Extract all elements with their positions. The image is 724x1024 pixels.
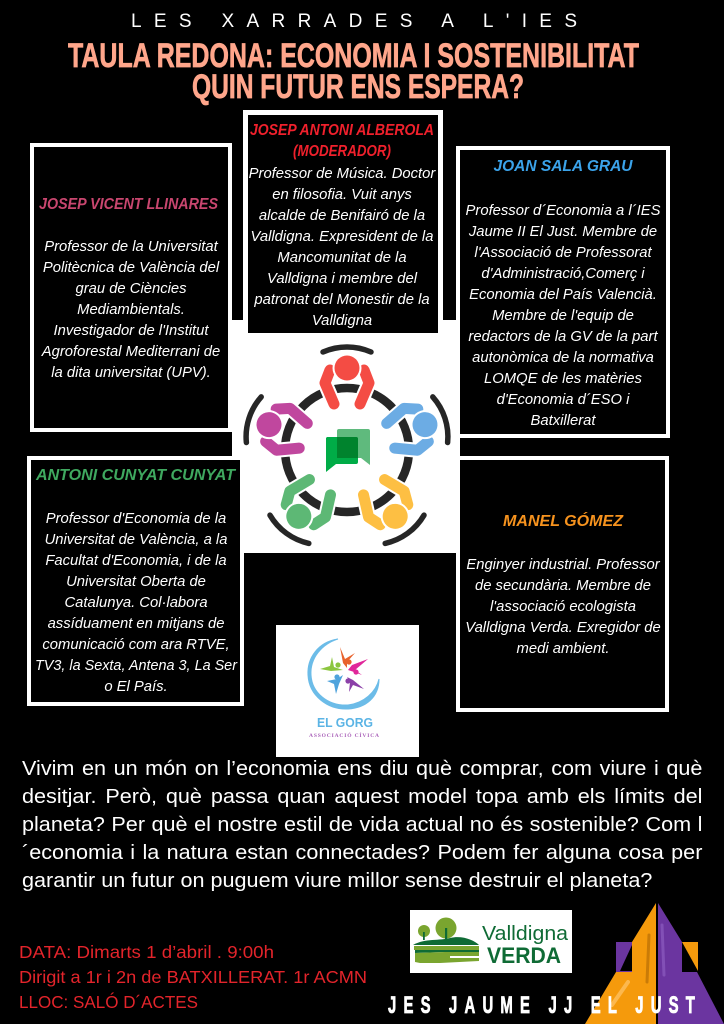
panel: Joan Sala Grau: autonòmica de la normativa — [472, 350, 654, 366]
trees — [418, 918, 456, 941]
logo text: Valldigna — [482, 923, 569, 945]
panel: Josep Antoni Alberola: Valldigna. Expresident de la — [251, 229, 433, 245]
event details — [19, 942, 367, 1012]
logo figures — [320, 647, 368, 694]
panel: Josep Antoni Alberola: Mancomunitat de la — [277, 250, 407, 266]
panel: Antoni Cunyat Cunyat: Universitat Oberta de — [66, 574, 206, 590]
logo: school triangle — [585, 903, 724, 1024]
logo: Valldigna Verda — [410, 910, 572, 973]
logo swirl — [308, 639, 379, 709]
logo name: EL GORG — [317, 716, 373, 730]
panel: Joan Sala Grau: d'Economia d´ESO i — [497, 392, 630, 408]
icon: outer arcs — [242, 347, 452, 547]
footer school name: JES JAUME JJ EL JUST — [388, 993, 695, 1019]
panel: Josep Antoni Alberola: en filosofia. Vuit anys — [272, 187, 412, 203]
panel: Josep Vicent Llinares: Politècnica de València del — [43, 260, 220, 276]
panel: Joan Sala Grau: Jaume II El Just. Membre de — [468, 224, 657, 240]
panel: Josep Antoni Alberola: Professor de Música. Doctor — [249, 166, 436, 182]
title: taula redona: QUIN FUTUR ENS ESPERA? — [192, 68, 524, 106]
panel: Josep Antoni Alberola: Valldigna — [312, 313, 372, 329]
panel: Joan Sala Grau: Economia del País Valencià. — [469, 287, 657, 303]
panel: Manel Gómez: MANEL GÓMEZ — [503, 512, 624, 530]
panel: Antoni Cunyat Cunyat: assíduament en mitjans de — [48, 616, 224, 632]
panel: Joan Sala Grau: redactors de la GV de la part — [468, 329, 658, 345]
intro paragraph: ´economia i la natura estan connectades? Podem fer alguna cosa per — [22, 842, 702, 864]
panel: Josep Vicent Llinares: la dita universitat (UPV). — [51, 365, 211, 381]
panel: Joan Sala Grau — [458, 148, 668, 436]
panel: Josep Antoni Alberola: (MODERADOR) — [293, 143, 391, 160]
panel: Josep Antoni Alberola: Valldigna i membre del — [267, 271, 418, 287]
panel: Antoni Cunyat Cunyat: o El País. — [104, 679, 168, 695]
panel: Antoni Cunyat Cunyat: Universitat de València, a la — [45, 532, 227, 548]
intro paragraph: planeta? Per què el nostre estil de vida actual no és sostenible? Com l — [22, 814, 702, 836]
intro paragraph: desitjar. Però, què passa quan aquest model topa amb els límits del — [22, 786, 702, 808]
panel: Joan Sala Grau: d'Administració,Comerç i — [481, 266, 645, 282]
panel: Joan Sala Grau: Membre de l'equip de — [492, 308, 634, 324]
logo: El Gorg — [276, 625, 419, 757]
panel: Antoni Cunyat Cunyat: comunicació com ara RTVE, — [42, 637, 230, 653]
panel: Josep Vicent Llinares: Professor de la Universitat — [44, 239, 219, 255]
logo subtitle: ASSOCIACIÓ CÍVICA — [309, 731, 379, 739]
panel: Antoni Cunyat Cunyat: Professor d'Economia de la — [46, 511, 226, 527]
icon: table ring — [285, 388, 409, 512]
panel: Josep Antoni Alberola — [246, 112, 440, 336]
panel: Joan Sala Grau: l'Associació de Professorat — [474, 245, 652, 261]
panel: Josep Vicent Llinares — [32, 145, 230, 430]
hills and fields — [413, 937, 479, 963]
panel: Manel Gómez — [458, 458, 667, 710]
central white backdrop with round table icon — [232, 320, 460, 553]
panel: Manel Gómez: Valldigna Verda. Exregidor de — [465, 620, 661, 636]
intro paragraph: Vivim en un món on l’economia ens diu què comprar, com viure i què — [22, 758, 702, 780]
panel: Josep Vicent Llinares: Agroforestal Mediterrani de — [41, 344, 220, 360]
panel: Antoni Cunyat Cunyat: Facultat d'Economia, i de la — [45, 553, 227, 569]
panel: Antoni Cunyat Cunyat: TV3, la Sexta, Antena 3, La Ser — [35, 658, 238, 674]
panel: Antoni Cunyat Cunyat: ANTONI CUNYAT CUNYAT — [35, 467, 237, 484]
panel: Antoni Cunyat Cunyat: Catalunya. Col·labora — [64, 595, 208, 611]
panel: Josep Vicent Llinares: Mediambientals. — [77, 302, 185, 318]
panel: Joan Sala Grau: Batxillerat — [531, 413, 596, 429]
panel: Josep Antoni Alberola: patronat del Monestir de la — [253, 292, 430, 308]
panel: Joan Sala Grau: Professor d´Economia a l´IES — [466, 203, 661, 219]
panel: Josep Vicent Llinares: JOSEP VICENT LLINARES — [39, 196, 219, 213]
icon: five people around the table — [248, 354, 446, 541]
panel: Joan Sala Grau: LOMQE de les matèries — [484, 371, 643, 387]
panel: Josep Antoni Alberola: JOSEP ANTONI ALBEROLA — [250, 122, 434, 139]
panel: Joan Sala Grau: JOAN SALA GRAU — [494, 158, 633, 175]
header: les xarrades a l'ies: LES XARRADES A L'IES — [131, 11, 577, 32]
event details: DATA: Dimarts 1 d’abril . 9:00h — [19, 942, 274, 962]
panel: Josep Vicent Llinares: grau de Ciències — [75, 281, 187, 297]
intro paragraph — [22, 758, 702, 892]
panel: Josep Antoni Alberola: alcalde de Benifairó de la — [259, 208, 425, 224]
panel: Antoni Cunyat Cunyat — [29, 458, 242, 704]
logo: Valldigna Verda: VERDA — [487, 943, 561, 968]
panel: Manel Gómez: l'associació ecologista — [490, 599, 636, 615]
panel: Manel Gómez: de secundària. Membre de — [475, 578, 651, 594]
panel: Manel Gómez: Enginyer industrial. Professor — [466, 557, 661, 573]
event details: LLOC: SALÓ D´ACTES — [19, 991, 198, 1012]
intro paragraph: garantir un futur on puguem viure millor sense destruir el planeta? — [22, 870, 652, 892]
panel: Manel Gómez: medi ambient. — [517, 641, 609, 657]
icon: chat bubbles — [326, 429, 370, 472]
event details: Dirigit a 1r i 2n de BATXILLERAT. 1r ACMN — [19, 967, 367, 987]
title: taula redona — [68, 37, 639, 106]
panel: Josep Vicent Llinares: Investigador de l'Institut — [54, 323, 209, 339]
